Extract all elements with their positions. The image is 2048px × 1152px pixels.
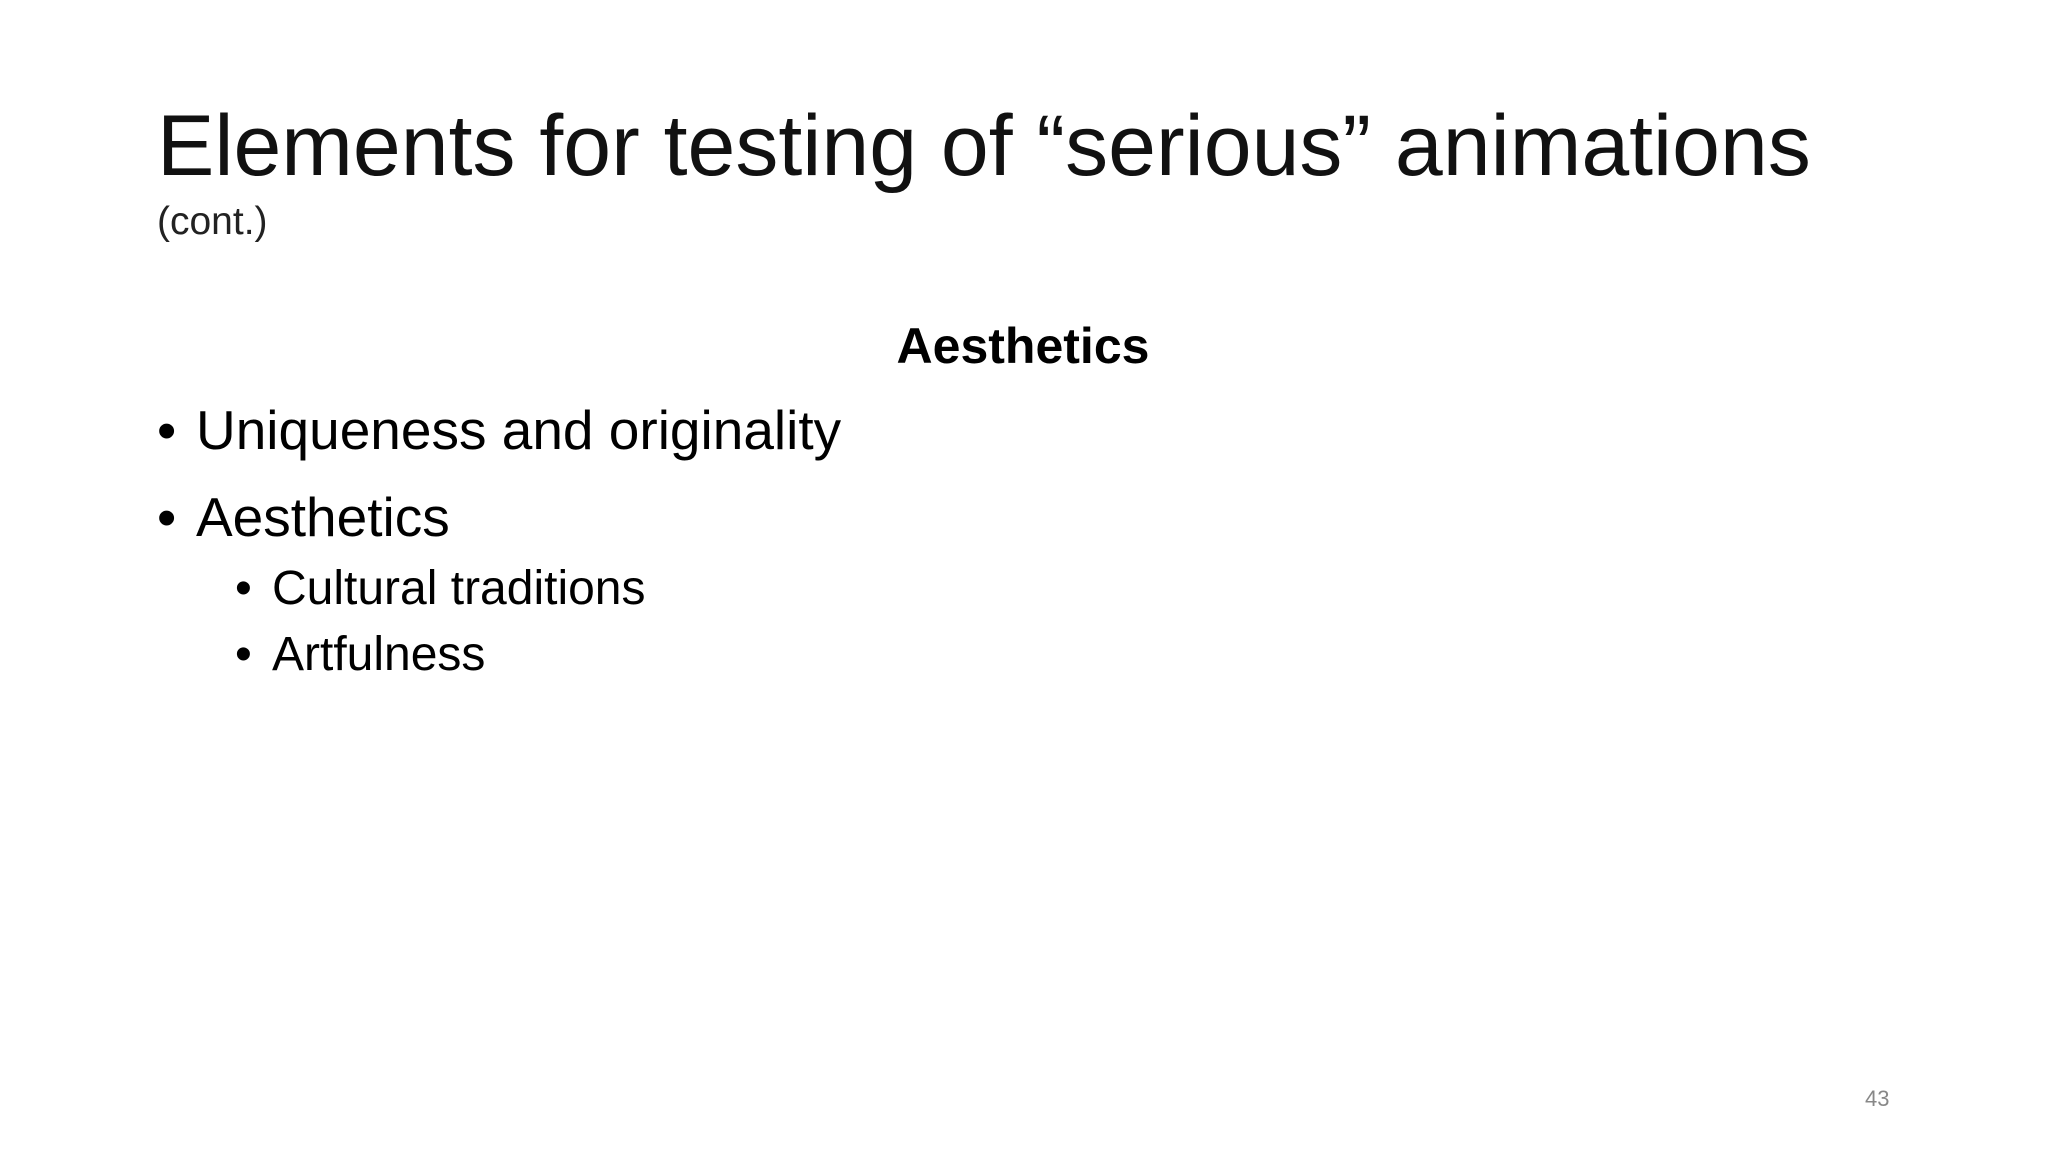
sub-bullet: Artfulness: Artfulness xyxy=(272,628,485,681)
bullet: Uniqueness and originality: • xyxy=(157,399,176,461)
bullet: Aesthetics: Aesthetics xyxy=(196,486,450,548)
sub-bullet: Artfulness: • xyxy=(235,628,252,681)
heading: Aesthetics: Aesthetics xyxy=(897,318,1149,374)
bullet: Uniqueness and originality: Uniqueness and originality xyxy=(196,399,841,461)
bullet list xyxy=(157,399,841,681)
sub-bullet: Cultural traditions: • xyxy=(235,562,252,615)
sub-bullet: Cultural traditions: Cultural traditions xyxy=(272,562,646,615)
bullet: Aesthetics: • xyxy=(157,486,176,548)
title: Elements for testing of “serious” animations xyxy=(157,98,1811,194)
subtitle: (cont.): (cont.) xyxy=(157,200,268,243)
page number: 43 xyxy=(1865,1086,1889,1111)
